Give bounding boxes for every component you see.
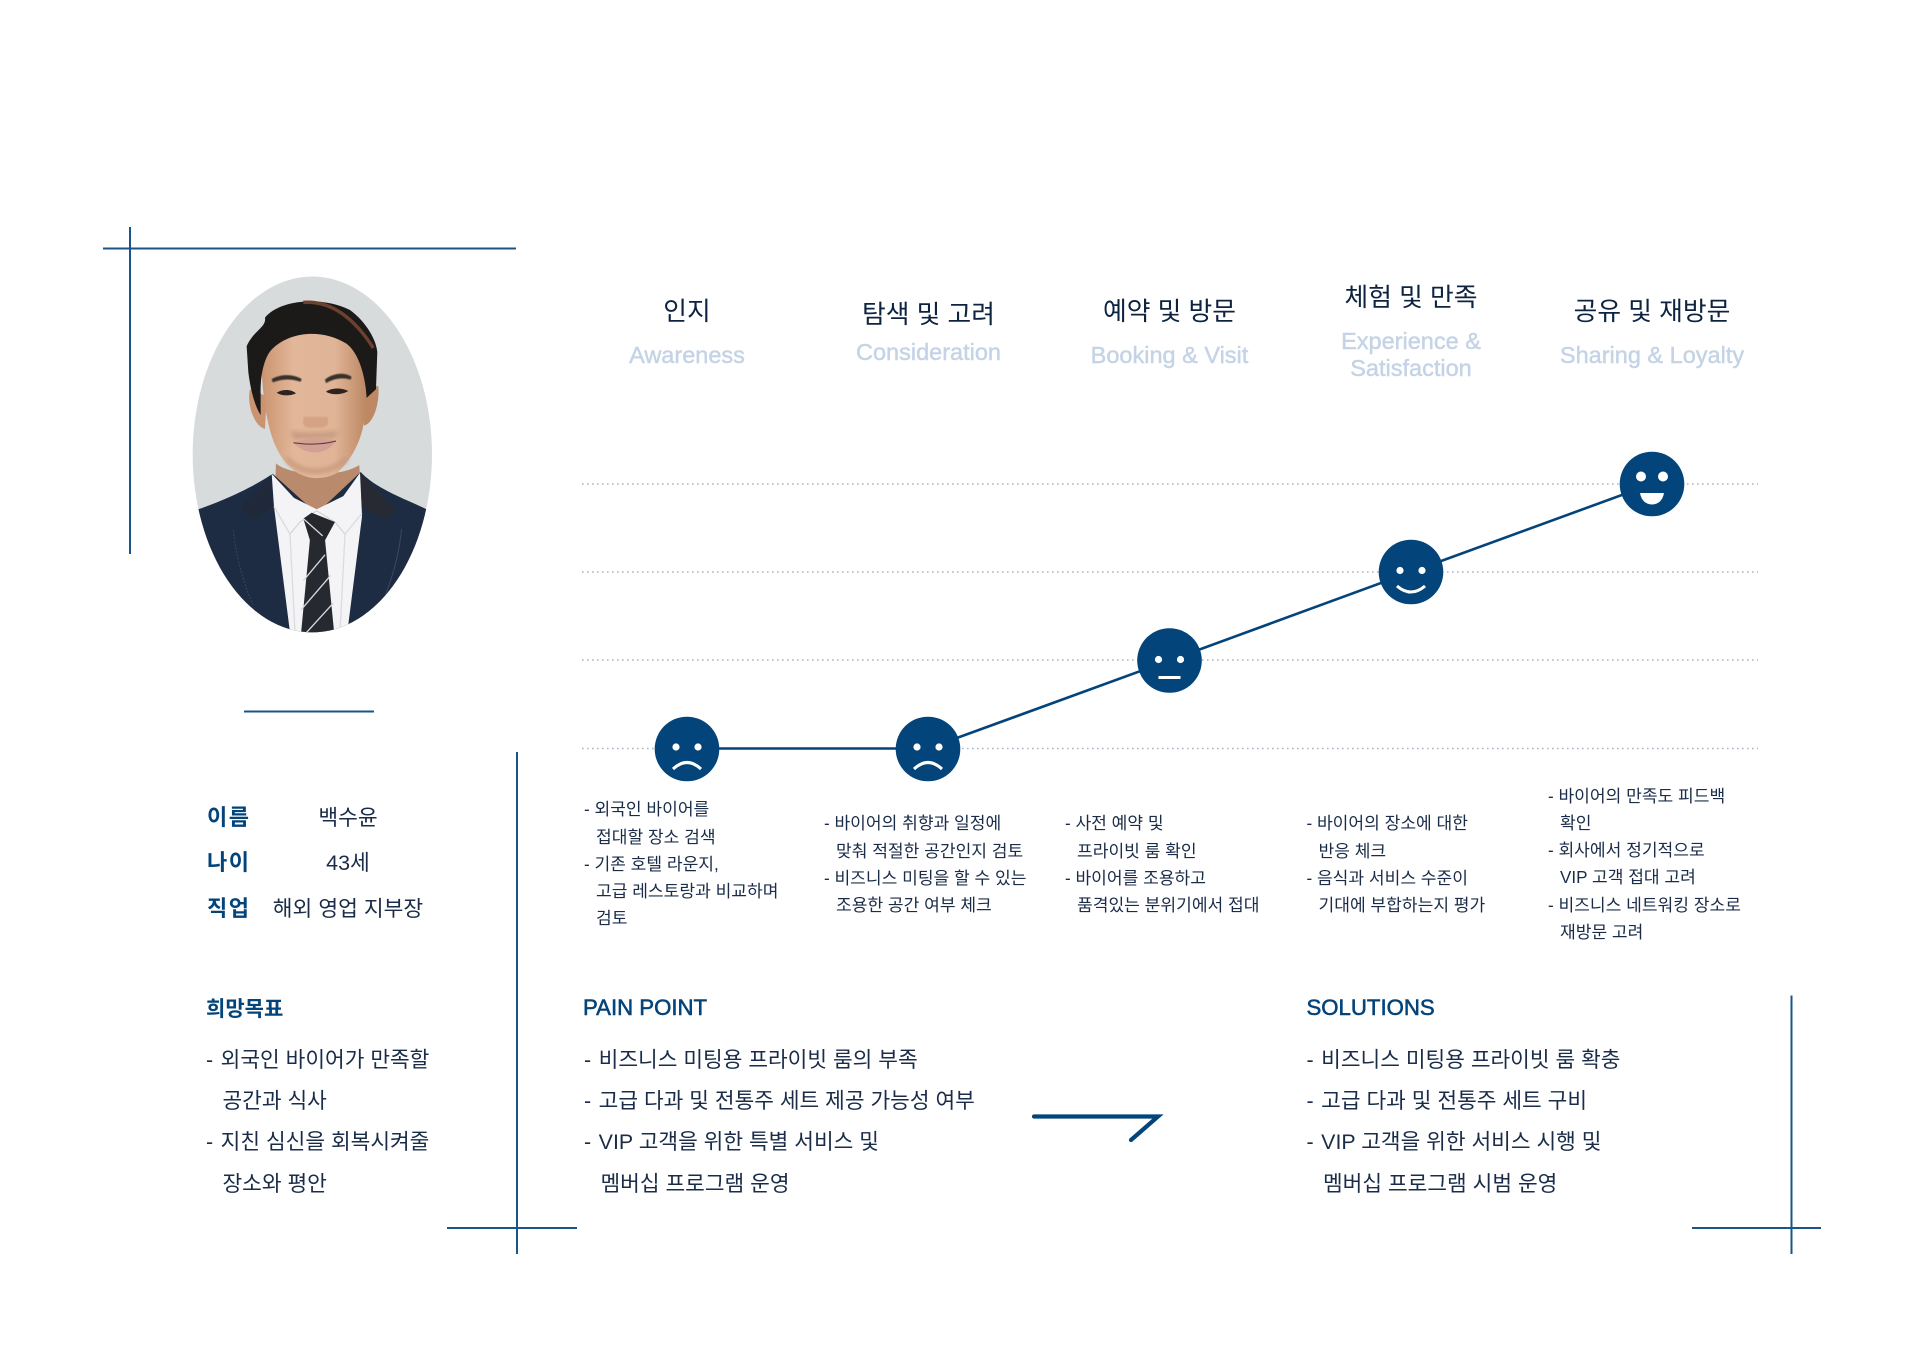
icon: sad face, consideration: [896, 717, 960, 781]
stage: booking and visit: 예약 및 방문: [1103, 298, 1236, 326]
text: sharing actions: - 회사에서 정기적으로: [1548, 841, 1705, 860]
stage: consideration: 탐색 및 고려: [862, 300, 995, 328]
heading: pain point: PAIN POINT: [583, 994, 707, 1020]
text: consideration actions: - 바이어의 취향과 일정에: [824, 814, 1001, 833]
text: pain point list: 멤버십 프로그램 운영: [600, 1172, 790, 1196]
frame: top-left crosshair: [103, 227, 516, 554]
text: pain point list: [584, 1048, 975, 1196]
text: goals list: 공간과 식사: [222, 1089, 327, 1113]
arrow: pain point to solutions: [1034, 1116, 1158, 1140]
profile: age: 43세: [326, 850, 370, 874]
stage: experience and satisfaction: Satisfaction: [1350, 354, 1472, 380]
text: solutions list: [1306, 1048, 1620, 1196]
profile: name: 백수윤: [318, 806, 378, 830]
profile: job: 해외 영업 지부장: [273, 897, 423, 921]
stage: awareness: 인지: [663, 298, 711, 326]
journey line: [687, 484, 1652, 748]
text: sharing actions: [1548, 787, 1741, 942]
text: solutions list: 멤버십 프로그램 시범 운영: [1323, 1172, 1557, 1196]
stage: sharing and loyalty: [1560, 298, 1744, 368]
text: goals list: 장소와 평안: [222, 1172, 327, 1196]
heading: solutions: SOLUTIONS: [1306, 994, 1435, 1020]
icon: smiling face, experience: [1379, 540, 1443, 604]
stage: experience and satisfaction: Experience &: [1341, 328, 1481, 354]
stage: awareness: [629, 298, 745, 368]
text: awareness actions: 고급 레스토랑과 비교하며: [596, 882, 778, 901]
text: booking actions: 품격있는 분위기에서 접대: [1077, 896, 1260, 915]
profile: name: [207, 804, 378, 830]
profile: age: [207, 850, 370, 874]
text: consideration actions: [824, 814, 1026, 915]
text: booking actions: 프라이빗 룸 확인: [1077, 842, 1197, 861]
frame: left-bottom crosshair: [447, 752, 577, 1254]
text: goals list: - 외국인 바이어가 만족할: [206, 1048, 429, 1072]
profile: job: 직업: [207, 896, 250, 921]
heading: goals: 희망목표: [206, 998, 283, 1021]
chart, frame lines and portrait artwork: [103, 227, 1821, 1254]
text: awareness actions: 검토: [596, 909, 627, 928]
text: experience actions: 기대에 부합하는지 평가: [1318, 896, 1485, 915]
icon: happy face, sharing: [1620, 452, 1684, 516]
text: sharing actions: 확인: [1560, 814, 1591, 833]
text: goals list: - 지친 심신을 회복시켜줄: [206, 1130, 429, 1154]
text: experience actions: - 바이어의 장소에 대한: [1306, 814, 1468, 833]
icon: very sad face, awareness: [655, 717, 719, 781]
stage: consideration: [856, 300, 1001, 365]
journey grid lines: [582, 484, 1758, 748]
stage: booking and visit: [1091, 298, 1248, 368]
text: solutions list: - VIP 고객을 위한 서비스 시행 및: [1306, 1130, 1601, 1154]
text: booking actions: - 바이어를 조용하고: [1065, 869, 1206, 888]
stage: booking and visit: Booking & Visit: [1091, 342, 1248, 368]
icon: neutral face, booking: [1137, 628, 1202, 693]
text: consideration actions: 맞춰 적절한 공간인지 검토: [836, 842, 1023, 861]
text: sharing actions: VIP 고객 접대 고려: [1560, 868, 1696, 887]
portrait photo illustration: [190, 276, 437, 634]
profile: name: 이름: [207, 804, 250, 830]
text: booking actions: [1065, 814, 1260, 915]
stage: consideration: Consideration: [856, 339, 1001, 365]
stage: awareness: Awareness: [629, 342, 745, 368]
text: pain point list: - 고급 다과 및 전통주 세트 제공 가능성 여부: [584, 1089, 975, 1113]
text: awareness actions: [584, 800, 778, 928]
text: pain point list: - VIP 고객을 위한 특별 서비스 및: [584, 1130, 879, 1154]
text: sharing actions: - 바이어의 만족도 피드백: [1548, 787, 1725, 806]
stage: experience and satisfaction: [1341, 284, 1481, 380]
text: consideration actions: - 비즈니스 미팅을 할 수 있는: [824, 869, 1026, 888]
profile: age: 나이: [207, 850, 250, 874]
stage: experience and satisfaction: 체험 및 만족: [1344, 284, 1478, 312]
text: awareness actions: - 외국인 바이어를: [584, 800, 709, 819]
text: goals list: [206, 1048, 429, 1196]
text: awareness actions: 접대할 장소 검색: [596, 828, 716, 847]
text: consideration actions: 조용한 공간 여부 체크: [836, 896, 992, 915]
profile: job: [207, 896, 423, 921]
text: solutions list: - 비즈니스 미팅용 프라이빗 룸 확충: [1306, 1048, 1620, 1072]
text: experience actions: - 음식과 서비스 수준이: [1306, 869, 1468, 888]
text: solutions list: - 고급 다과 및 전통주 세트 구비: [1306, 1089, 1587, 1113]
text: experience actions: [1306, 814, 1485, 915]
stage: sharing and loyalty: Sharing & Loyalty: [1560, 342, 1744, 368]
stage: sharing and loyalty: 공유 및 재방문: [1574, 298, 1730, 326]
text: sharing actions: 재방문 고려: [1560, 923, 1643, 942]
text: sharing actions: - 비즈니스 네트워킹 장소로: [1548, 896, 1741, 915]
frame: divider under portrait: [244, 710, 374, 712]
text: awareness actions: - 기존 호텔 라운지,: [584, 855, 719, 874]
text: experience actions: 반응 체크: [1318, 842, 1386, 861]
text: pain point list: - 비즈니스 미팅용 프라이빗 룸의 부족: [584, 1048, 918, 1072]
frame: right-bottom crosshair: [1692, 996, 1821, 1254]
text: booking actions: - 사전 예약 및: [1065, 814, 1164, 833]
